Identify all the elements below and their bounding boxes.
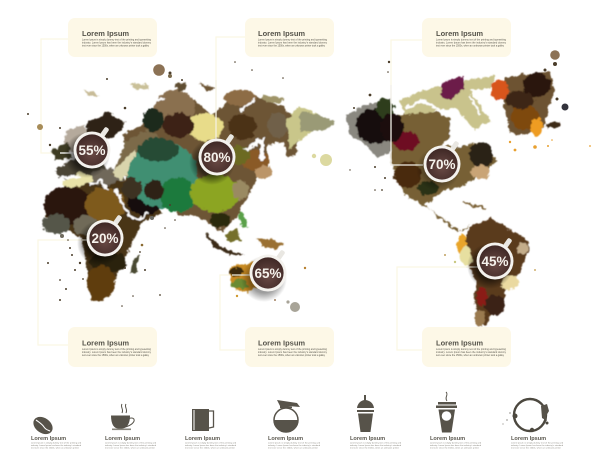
- caption: takeaway cup: industry. Lorem Ipsum has been the industry's standard: [430, 444, 481, 447]
- cup badge: 20%: 20%: [91, 231, 119, 246]
- panel: top center: [245, 18, 334, 57]
- caption: stain: industry. Lorem Ipsum has been the industry's standard: [511, 444, 563, 447]
- caption: mug: Lorem Ipsum: [185, 436, 220, 442]
- panel: top center: industry. Lorem Ipsum has been the industry's standard dummy: [258, 42, 328, 44]
- caption: takeaway cup: text ever since the 1500s, when an unknown printer: [430, 446, 479, 450]
- Greenland: [491, 72, 560, 136]
- North America: [380, 75, 497, 232]
- panel: bottom right: text ever since the 1500s, when an unknown printer took a galley: [436, 354, 505, 357]
- caption: stain: text ever since the 1500s, when an unknown printer: [511, 446, 561, 450]
- panel: bottom right: industry. Lorem Ipsum has been the industry's standard dummy: [436, 351, 507, 354]
- caption: cup: Lorem Ipsum: [105, 436, 140, 442]
- South America: [457, 202, 530, 327]
- caption: mug: text ever since the 1500s, when an unknown printer: [185, 446, 235, 450]
- panel: bottom right: Lorem Ipsum is simply dummy text of the printing and typesetting: [436, 348, 507, 351]
- cup badge: 45%: 45%: [481, 254, 509, 269]
- caption: cup: [105, 436, 156, 450]
- icon: coffee bean: [30, 413, 56, 438]
- caption: takeaway cup: Lorem Ipsum: [430, 436, 465, 442]
- caption: bean: Lorem Ipsum is simply dummy text of the printing and: [31, 442, 81, 444]
- panel: top right: [422, 18, 511, 57]
- caption: carafe: Lorem Ipsum: [268, 436, 303, 442]
- panel: top center: Lorem Ipsum is simply dummy text of the printing and typesetting: [258, 38, 328, 42]
- Alaska and far east: [300, 98, 396, 158]
- world map: old world: [42, 72, 560, 327]
- caption: takeaway cup: Lorem Ipsum is simply dummy text of the printing and: [430, 442, 481, 444]
- caption: milkshake: industry. Lorem Ipsum has been the industry's standard: [350, 444, 401, 447]
- panel: top left: Lorem Ipsum: [82, 29, 129, 38]
- panel: top center: Lorem Ipsum: [258, 29, 305, 38]
- caption: stain: Lorem Ipsum is simply dummy text of the printing and: [511, 442, 563, 444]
- white gaps through the land: [60, 95, 500, 220]
- caption: cup: Lorem Ipsum is simply dummy text of the printing and: [105, 442, 156, 444]
- panel: top left: Lorem Ipsum is simply dummy text of the printing and typesetting: [82, 38, 152, 42]
- panel: top right: industry. Lorem Ipsum has been the industry's standard dummy: [436, 42, 507, 44]
- panel: bottom right: Lorem Ipsum: [436, 338, 483, 348]
- caption: mug: industry. Lorem Ipsum has been the industry's standard: [185, 444, 236, 447]
- panel: bottom right: [422, 327, 511, 367]
- white connector segments over the map: [60, 80, 478, 275]
- panel: bottom left: Lorem Ipsum is simply dummy text of the printing and typesetting: [82, 348, 152, 351]
- panel: bottom center: [245, 327, 334, 367]
- panel: bottom center: industry. Lorem Ipsum has been the industry's standard dummy: [258, 351, 328, 354]
- caption: carafe: industry. Lorem Ipsum has been the industry's standard: [268, 444, 320, 447]
- panel: top left: industry. Lorem Ipsum has been the industry's standard dummy: [82, 42, 152, 44]
- icon: milkshake cup: [357, 395, 374, 432]
- icon: steaming cup: [111, 404, 134, 430]
- panel: top right: Lorem Ipsum: [436, 29, 483, 38]
- panel: bottom left: text ever since the 1500s, when an unknown printer took a galley: [82, 354, 150, 357]
- Green regions: [122, 108, 250, 228]
- caption: mug: Lorem Ipsum is simply dummy text of the printing and: [185, 442, 236, 444]
- cup badge: 80%: [189, 133, 236, 185]
- caption: stain: Lorem Ipsum: [511, 436, 546, 442]
- panel: top left: [68, 18, 157, 57]
- cup badge: 70%: 70%: [428, 157, 456, 172]
- caption: takeaway cup: [430, 436, 481, 450]
- caption: carafe: Lorem Ipsum is simply dummy text of the printing and: [268, 442, 320, 444]
- caption: bean: text ever since the 1500s, when an unknown printer: [31, 446, 79, 450]
- cup badge: 80%: 80%: [203, 150, 231, 165]
- splatter dots: [27, 50, 591, 312]
- panel: top left: text ever since the 1500s, when an unknown printer took a galley: [82, 44, 150, 48]
- icon: takeaway cup: [436, 392, 457, 432]
- cup badge: 45%: [467, 237, 514, 289]
- caption: milkshake: [350, 436, 401, 450]
- cup badge: 55%: 55%: [78, 143, 106, 158]
- Asia land: [112, 90, 300, 232]
- caption: stain: [511, 436, 563, 450]
- panel: bottom left: industry. Lorem Ipsum has been the industry's standard dummy: [82, 351, 152, 354]
- Europe: [52, 112, 125, 190]
- panel: bottom center: Lorem Ipsum is simply dummy text of the printing and typesetting: [258, 348, 328, 351]
- panel: top center: text ever since the 1500s, when an unknown printer took a galley: [258, 44, 326, 48]
- cup badge: 70%: [416, 140, 460, 191]
- caption: mug: [185, 436, 236, 450]
- caption: bean: Lorem Ipsum: [31, 436, 66, 442]
- caption: cup: industry. Lorem Ipsum has been the industry's standard: [105, 444, 156, 447]
- icon: mug: [192, 409, 214, 431]
- panel: bottom left: Lorem Ipsum: [82, 338, 129, 348]
- panel: bottom left: [68, 327, 157, 367]
- cup badge: 65%: [241, 249, 287, 302]
- icon: coffee stain ring: [502, 399, 549, 432]
- cup badge: 55%: [64, 126, 110, 178]
- panel: bottom center: text ever since the 1500s, when an unknown printer took a galley: [258, 354, 326, 357]
- East fringe and islands: [83, 82, 325, 255]
- cup badge: 65%: 65%: [254, 266, 282, 281]
- caption: bean: industry. Lorem Ipsum has been the industry's standard: [31, 444, 81, 447]
- panel: bottom center: Lorem Ipsum: [258, 338, 305, 348]
- panel: top right: text ever since the 1500s, when an unknown printer took a galley: [436, 44, 505, 48]
- caption: cup: text ever since the 1500s, when an unknown printer: [105, 446, 155, 450]
- caption: milkshake: Lorem Ipsum is simply dummy text of the printing and: [350, 442, 401, 444]
- panel: top right: Lorem Ipsum is simply dummy text of the printing and typesetting: [436, 38, 507, 42]
- caption: carafe: [268, 436, 320, 450]
- cup badge: 20%: [77, 214, 124, 266]
- Africa: [42, 178, 162, 302]
- caption: milkshake: Lorem Ipsum: [350, 436, 385, 442]
- Australia: [230, 260, 260, 292]
- caption: milkshake: text ever since the 1500s, when an unknown printer: [350, 446, 399, 450]
- caption: carafe: text ever since the 1500s, when an unknown printer: [268, 446, 318, 450]
- connector lines: [38, 37, 470, 350]
- icon: coffee carafe: [274, 400, 300, 432]
- caption: bean: [31, 436, 81, 450]
